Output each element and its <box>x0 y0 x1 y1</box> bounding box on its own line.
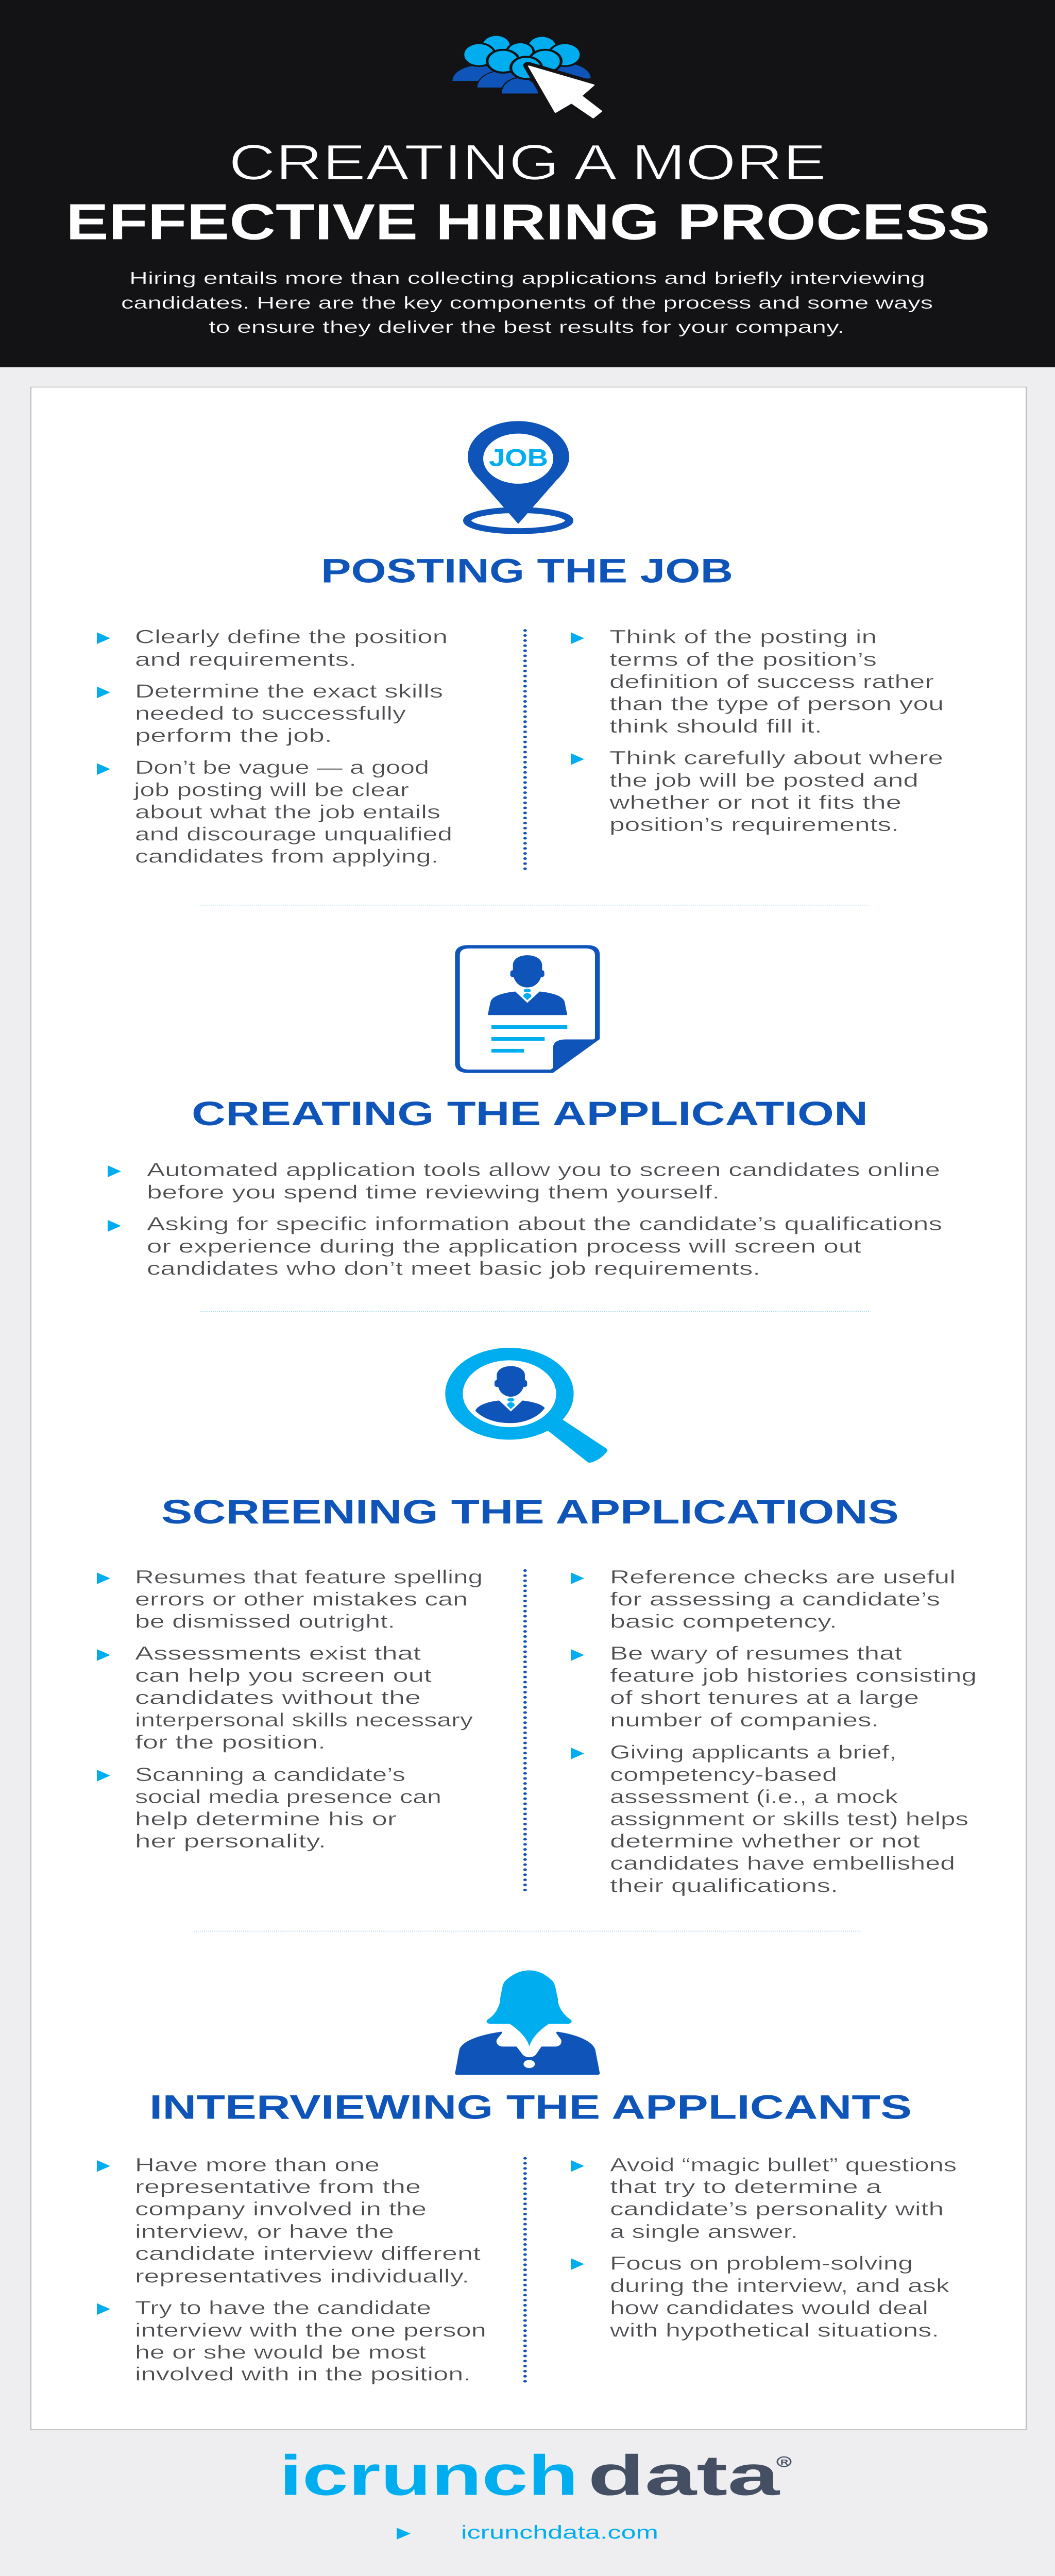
bullet: assessments: interpersonal skills necessary <box>135 1709 473 1731</box>
bullet: don't be vague: about what the job entails <box>135 801 440 823</box>
bullet: exact skills: perform the job. <box>135 724 332 746</box>
bullet: automated tools: Automated application tools allow you to screen candidates online <box>147 1159 940 1180</box>
bullet: social media: Scanning a candidate’s <box>135 1764 405 1785</box>
left bullet list <box>97 1566 483 1852</box>
bullet: automated tools <box>108 1159 940 1203</box>
bullet: competency assessment: Giving applicants a brief, <box>610 1741 896 1763</box>
bullet: short tenures: of short tenures at a large <box>610 1687 919 1708</box>
bullet: specific information <box>108 1213 942 1279</box>
bullet: where posted: whether or not it fits the <box>609 791 901 813</box>
bullet: one person <box>97 2297 486 2385</box>
bullet: don't be vague: candidates from applying. <box>135 845 438 867</box>
intro paragraph <box>121 269 933 337</box>
bullet: more than one representative: Have more than one <box>135 2154 380 2175</box>
bullet: define the position <box>97 626 448 670</box>
header banner <box>0 0 1055 367</box>
bullet: short tenures <box>571 1642 977 1731</box>
bullet: definition of success: Think of the posting in <box>609 626 877 648</box>
intro paragraph: Hiring entails more than collecting applications and briefly interviewing <box>129 269 925 287</box>
bullet: don't be vague <box>97 756 452 867</box>
bullet: reference checks <box>571 1566 956 1632</box>
bullet: exact skills: needed to successfully <box>135 702 406 724</box>
bullet: specific information: Asking for specific information about the candidate’s qualifications <box>147 1213 942 1234</box>
bullet: define the position: and requirements. <box>135 649 356 670</box>
bullet: one person: interview with the one person <box>135 2319 486 2341</box>
bullet: assessments: candidates without the <box>135 1687 421 1708</box>
bullet: problem-solving <box>571 2252 949 2341</box>
bullet: don't be vague: job posting will be clear <box>133 779 409 801</box>
bullet: definition of success: definition of success rather <box>609 671 934 692</box>
bullet: where posted: the job will be posted and <box>609 769 918 791</box>
bullet: short tenures: feature job histories consisting <box>610 1665 977 1686</box>
website link: icrunchdata.com <box>461 2522 658 2543</box>
icon: crowd with cursor <box>452 36 602 118</box>
title line 1: CREATING A MORE <box>229 134 826 191</box>
bullet: assessments: can help you screen out <box>135 1665 432 1686</box>
bullet: spelling errors: errors or other mistakes can <box>135 1588 468 1610</box>
icon: job location pin <box>467 421 569 531</box>
bullet: competency assessment: candidates have embellished <box>610 1852 955 1874</box>
bullet: social media: her personality. <box>135 1830 326 1852</box>
bullet: specific information: candidates who don’t meet basic job requirements. <box>147 1258 760 1279</box>
bullet: short tenures: Be wary of resumes that <box>610 1642 903 1664</box>
bullet: magic bullet: candidate’s personality with <box>610 2198 944 2219</box>
bullet: spelling errors <box>97 1566 483 1632</box>
bullet: assessments: for the position. <box>135 1731 326 1753</box>
bullet: reference checks: for assessing a candidate’s <box>610 1588 940 1610</box>
bullet: more than one representative <box>97 2154 481 2287</box>
bullet: magic bullet: a single answer. <box>610 2221 798 2242</box>
bullet: competency assessment: assignment or skills test) helps <box>610 1808 968 1829</box>
bullet: definition of success: think should fill it. <box>609 715 822 737</box>
left bullet list <box>97 2154 486 2385</box>
bullet: more than one representative: company involved in the <box>135 2198 427 2219</box>
bullet: problem-solving: with hypothetical situations. <box>609 2319 939 2341</box>
bullet: competency assessment <box>571 1741 968 1896</box>
bullet: reference checks: Reference checks are useful <box>610 1566 956 1588</box>
bullet: magic bullet: Avoid “magic bullet” questions <box>610 2154 957 2175</box>
bullet: one person: involved with in the position. <box>135 2363 471 2385</box>
bullet: spelling errors: Resumes that feature spelling <box>135 1566 483 1588</box>
icon: magnifying glass with person <box>454 1354 607 1463</box>
bullet: spelling errors: be dismissed outright. <box>135 1611 395 1632</box>
bullet: more than one representative: candidate interview different <box>135 2243 481 2264</box>
bullet: don't be vague: and discourage unqualified <box>135 823 452 845</box>
intro paragraph: to ensure they deliver the best results for your company. <box>209 318 844 337</box>
bullet: reference checks: basic competency. <box>610 1611 837 1632</box>
bullet: magic bullet <box>571 2154 957 2242</box>
bullet: don't be vague: Don’t be vague — a good <box>135 756 429 778</box>
bullet: competency assessment: competency-based <box>610 1764 837 1785</box>
bullet: competency assessment: assessment (i.e., a mock <box>610 1786 898 1807</box>
bullet: magic bullet: that try to determine a <box>610 2176 882 2197</box>
intro paragraph: candidates. Here are the key components of the process and some ways <box>121 294 933 312</box>
section: posting the job <box>97 421 944 869</box>
logo: icrunchdata <box>279 2444 791 2507</box>
heading: interviewing the applicants: INTERVIEWING THE APPLICANTS <box>149 2088 912 2126</box>
bullet: exact skills: Determine the exact skills <box>135 680 443 702</box>
right bullet list <box>571 1566 977 1896</box>
bullet: social media: social media presence can <box>135 1786 441 1807</box>
bullet: problem-solving: how candidates would deal <box>610 2297 928 2318</box>
left bullet list <box>97 626 452 867</box>
bullet: more than one representative: interview, or have the <box>135 2221 394 2242</box>
heading: screening the applications: SCREENING THE APPLICATIONS <box>161 1493 899 1531</box>
icon: job location pin: JOB <box>489 445 548 471</box>
logo: icrunchdata: data <box>588 2444 780 2507</box>
right bullet list <box>571 626 944 835</box>
section: creating the application <box>108 945 942 1279</box>
bullet: one person: Try to have the candidate <box>135 2297 431 2318</box>
heading: posting the job: POSTING THE JOB <box>321 552 733 590</box>
section: screening the applications <box>97 1354 977 1896</box>
bullet: assessments <box>97 1642 473 1753</box>
bullet: where posted <box>571 747 943 835</box>
bullet list <box>108 1159 942 1279</box>
bullet: more than one representative: representatives individually. <box>135 2265 469 2287</box>
bullet: definition of success <box>571 626 944 737</box>
section: interviewing the applicants <box>97 1970 957 2385</box>
bullet: assessments: Assessments exist that <box>135 1642 421 1664</box>
bullet: definition of success: than the type of person you <box>609 693 944 715</box>
bullet: where posted: position’s requirements. <box>609 814 899 835</box>
bullet: competency assessment: determine whether or not <box>610 1830 921 1852</box>
right bullet list <box>571 2154 957 2341</box>
bullet: one person: he or she would be most <box>135 2341 426 2363</box>
icon: woman silhouette <box>455 1970 600 2075</box>
bullet: definition of success: terms of the position’s <box>609 649 877 670</box>
bullet: specific information: or experience during the application process will screen out <box>147 1235 862 1257</box>
heading: creating the application: CREATING THE APPLICATION <box>192 1095 868 1132</box>
bullet: where posted: Think carefully about where <box>609 747 943 769</box>
panel: main white card <box>31 387 1026 2430</box>
bullet: short tenures: number of companies. <box>610 1709 879 1731</box>
bullet: problem-solving: Focus on problem-solving <box>610 2252 913 2274</box>
logo: icrunchdata: R <box>780 2458 788 2466</box>
bullet: automated tools: before you spend time reviewing them yourself. <box>147 1181 720 1203</box>
logo: icrunchdata: icrunch <box>279 2444 578 2507</box>
bullet: social media <box>97 1764 441 1852</box>
bullet: problem-solving: during the interview, and ask <box>610 2275 949 2296</box>
bullet: social media: help determine his or <box>135 1808 397 1829</box>
bullet: exact skills <box>97 680 443 746</box>
bullet: define the position: Clearly define the position <box>135 626 448 648</box>
icon: resume document <box>455 945 600 1073</box>
bullet: competency assessment: their qualifications. <box>610 1875 838 1896</box>
bullet: more than one representative: representative from the <box>135 2176 421 2197</box>
